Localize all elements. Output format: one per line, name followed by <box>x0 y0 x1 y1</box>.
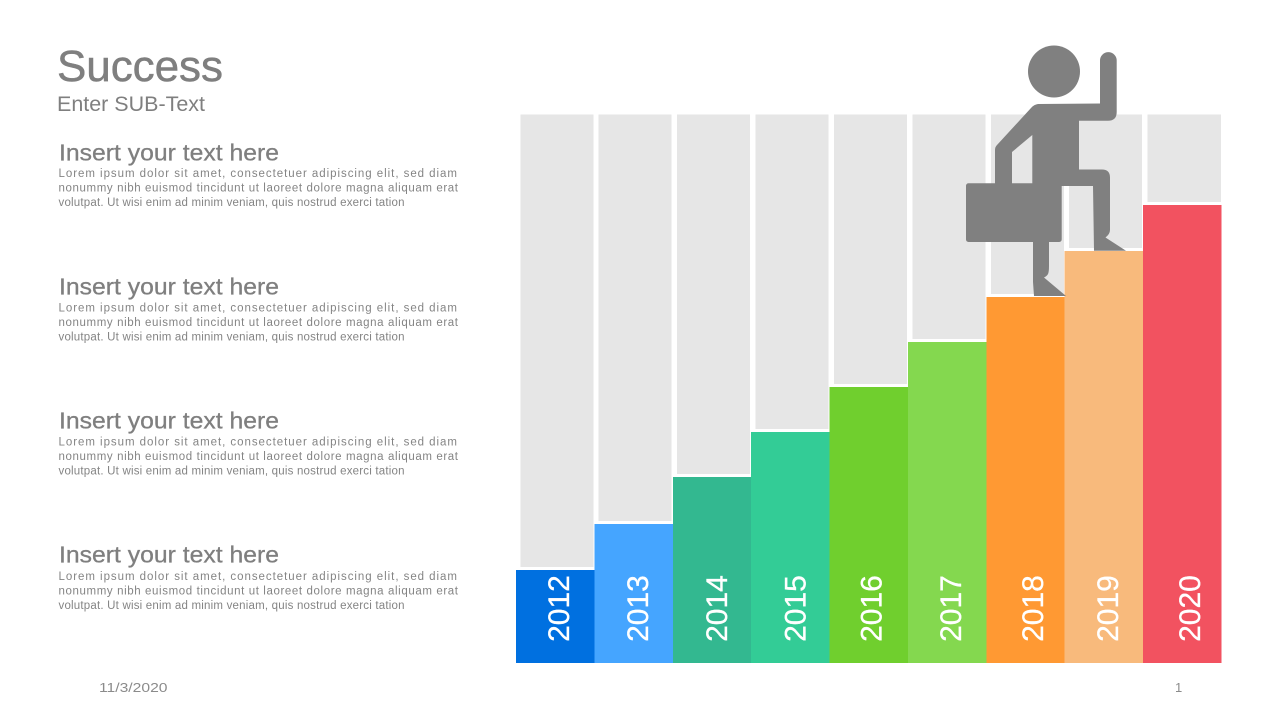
chart: stair bars <box>516 205 1222 663</box>
bar 2018 <box>986 297 1064 663</box>
text block 2 <box>58 274 459 344</box>
text block 3: Insert your text here <box>59 408 279 434</box>
bar 2016 <box>830 387 908 663</box>
title: Success <box>57 42 223 91</box>
bar 2020 <box>1143 205 1222 663</box>
icon: person climbing stairs with briefcase <box>966 46 1126 296</box>
footer date: 11/3/2020 <box>99 680 168 695</box>
bar 2014: 2014 <box>701 575 734 642</box>
bar 2018: 2018 <box>1017 575 1050 642</box>
bar 2015 <box>751 432 830 663</box>
text block 4: Insert your text here <box>59 542 279 568</box>
bar 2019: 2019 <box>1092 575 1125 642</box>
text block 1: Insert your text here <box>59 140 279 166</box>
page number: 1 <box>1175 680 1182 695</box>
text block 2: Lorem ipsum dolor sit amet, consectetuer adipiscing elit, sed diam <box>58 302 457 314</box>
bar 2012: 2012 <box>543 575 576 642</box>
bar 2013 <box>594 524 673 663</box>
text block 4: Lorem ipsum dolor sit amet, consectetuer adipiscing elit, sed diam <box>58 571 457 583</box>
text block 4: volutpat. Ut wisi enim ad minim veniam, quis nostrud exerci tation <box>58 600 404 612</box>
text block 1: volutpat. Ut wisi enim ad minim veniam, quis nostrud exerci tation <box>58 197 404 209</box>
chart: background columns <box>520 114 1221 567</box>
text block 1 <box>58 140 459 209</box>
bar 2017: 2017 <box>935 575 968 642</box>
bar 2019 <box>1064 251 1143 663</box>
subtitle: Enter SUB-Text <box>57 93 205 116</box>
text block 2: nonummy nibh euismod tincidunt ut laoreet dolore magna aliquam erat <box>58 317 459 329</box>
text block 3: nonummy nibh euismod tincidunt ut laoreet dolore magna aliquam erat <box>58 451 459 463</box>
text block 1: Lorem ipsum dolor sit amet, consectetuer adipiscing elit, sed diam <box>58 168 457 180</box>
bar 2012 <box>516 570 594 663</box>
text block 4: nonummy nibh euismod tincidunt ut laoreet dolore magna aliquam erat <box>58 586 459 598</box>
bar 2016: 2016 <box>856 575 888 642</box>
bar 2014 <box>673 477 751 663</box>
text block 4 <box>58 542 459 612</box>
bar 2015: 2015 <box>780 575 812 642</box>
text block 3: volutpat. Ut wisi enim ad minim veniam, quis nostrud exerci tation <box>58 466 404 478</box>
text block 3 <box>58 408 459 478</box>
bar 2017 <box>908 342 986 663</box>
text block 1: nonummy nibh euismod tincidunt ut laoreet dolore magna aliquam erat <box>58 182 459 194</box>
text block 3: Lorem ipsum dolor sit amet, consectetuer adipiscing elit, sed diam <box>58 436 457 448</box>
text block 2: volutpat. Ut wisi enim ad minim veniam, quis nostrud exerci tation <box>58 332 404 344</box>
bar 2020: 2020 <box>1174 575 1207 642</box>
text block 2: Insert your text here <box>59 274 279 300</box>
bar 2013: 2013 <box>622 575 655 642</box>
